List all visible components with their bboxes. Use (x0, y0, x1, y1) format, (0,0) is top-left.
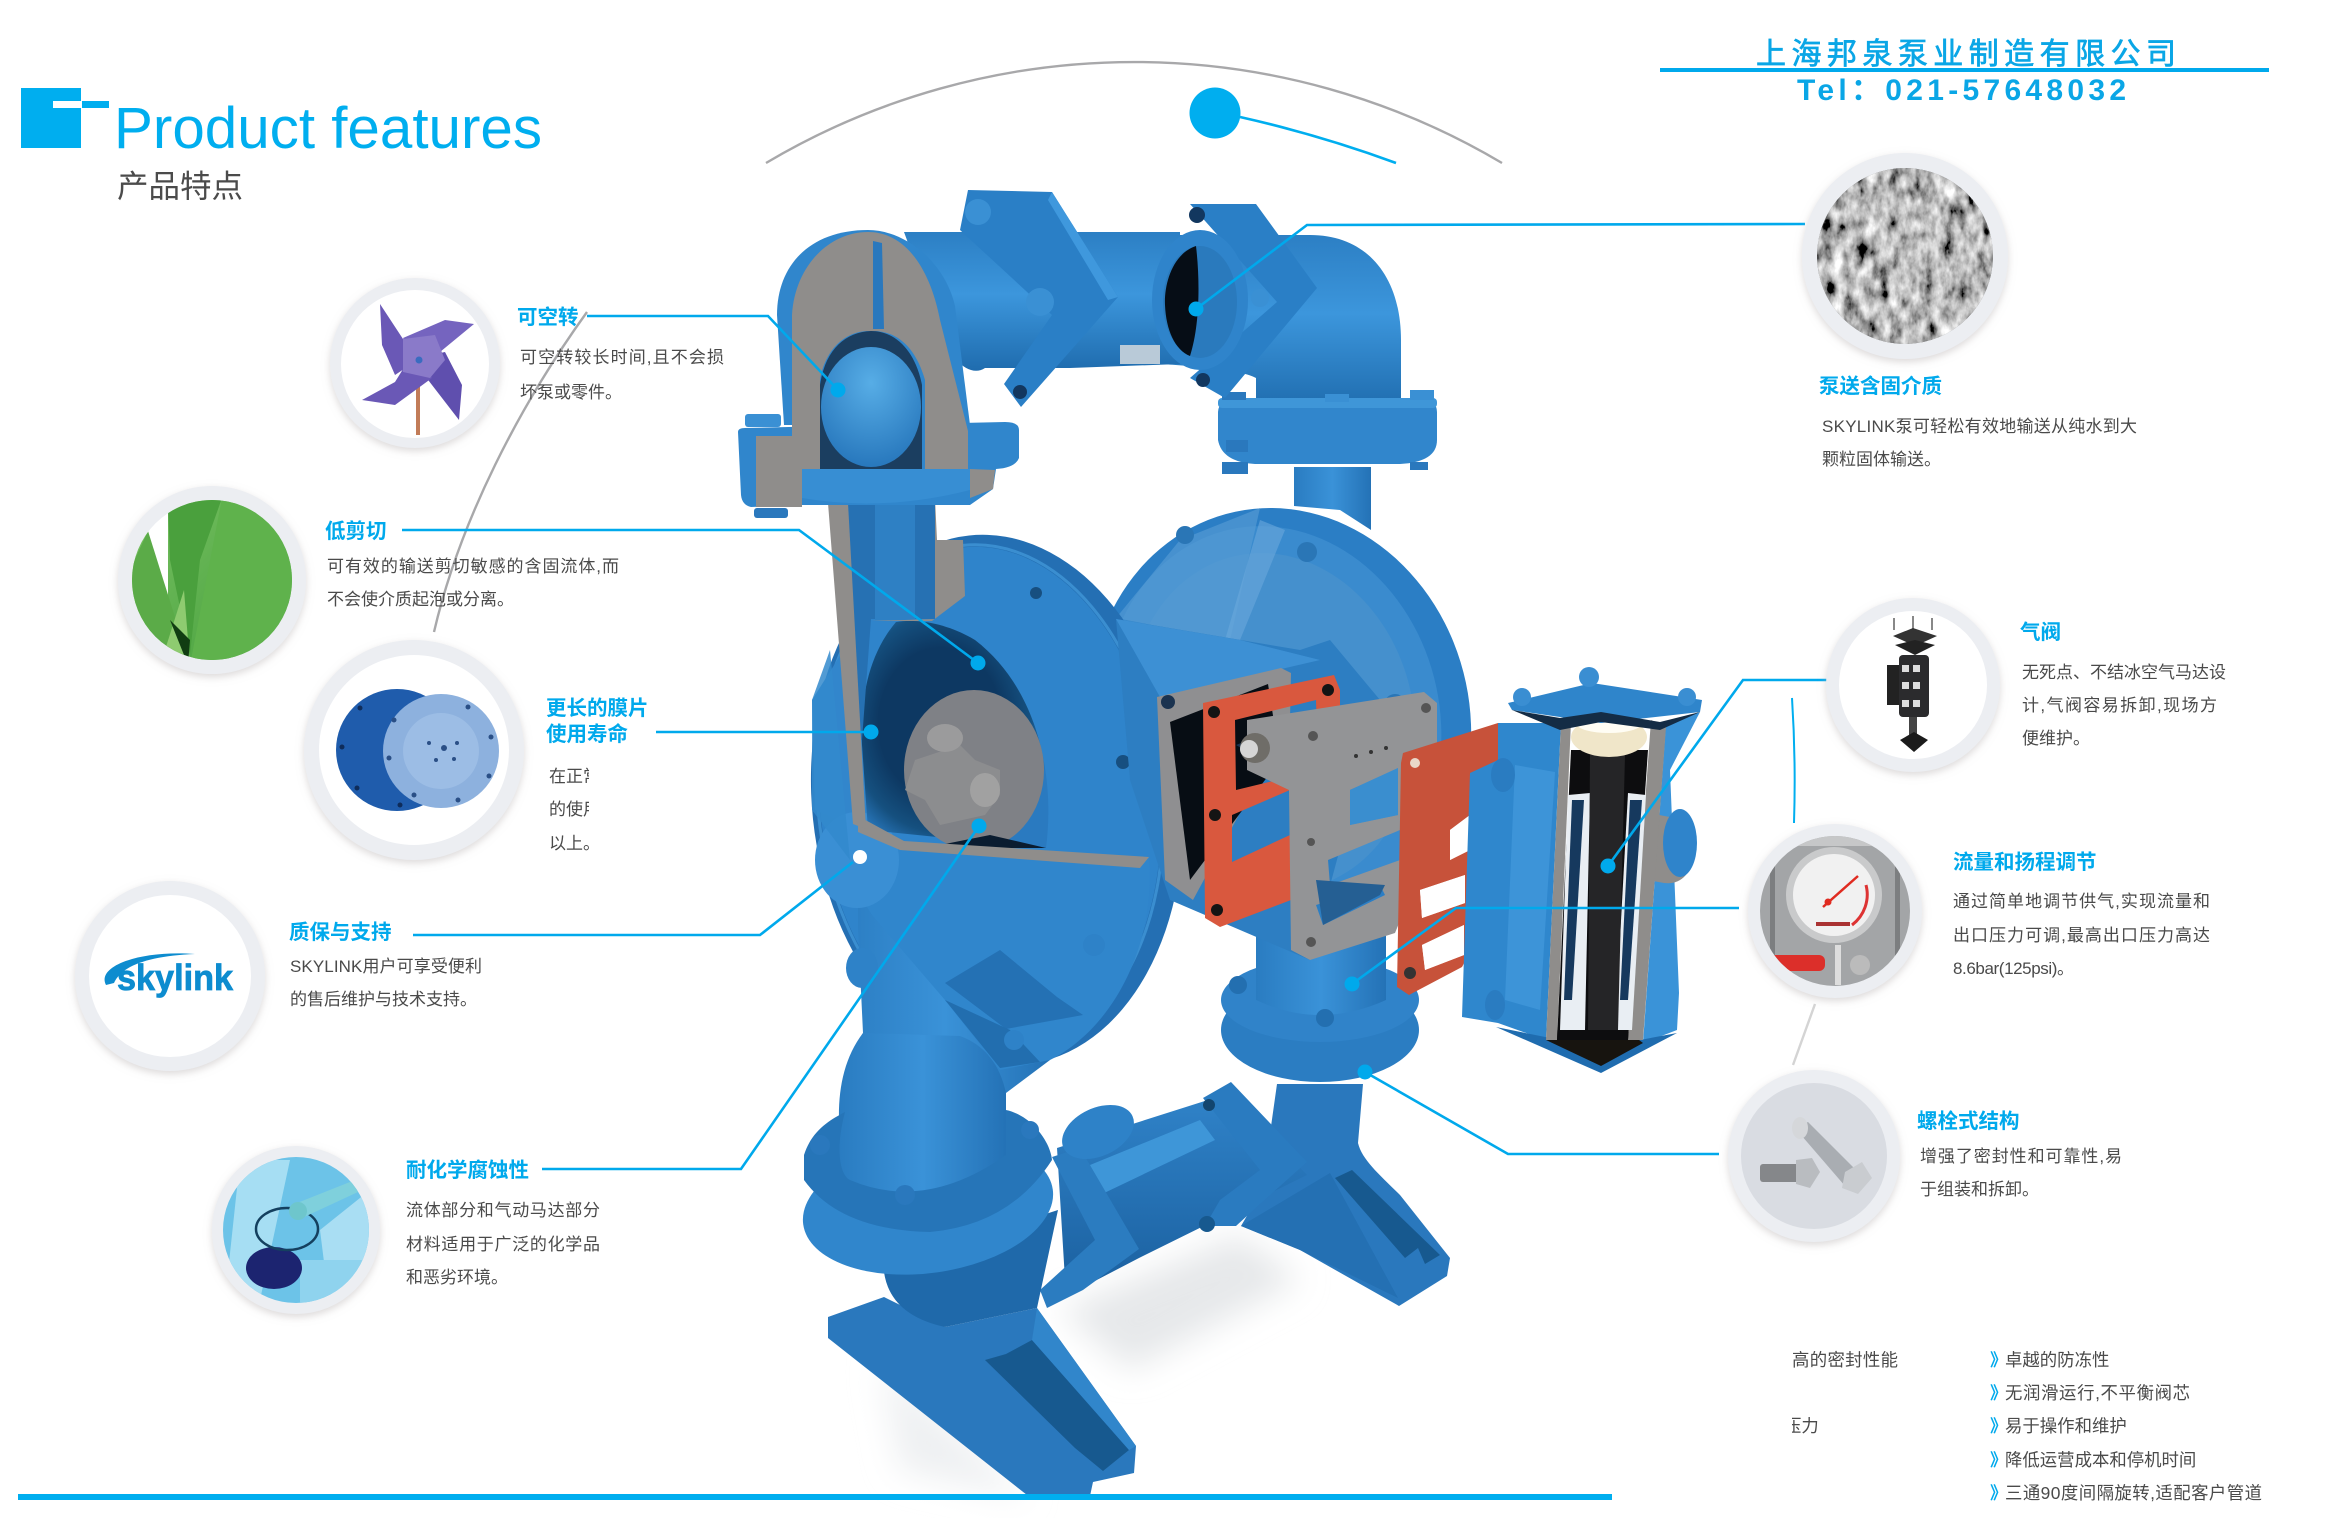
body text: 流体部分和气动马达部分 (406, 1201, 600, 1220)
icon: pinwheel (330, 278, 500, 448)
bullet list: 三通90度间隔旋转,适配客户管道 (2005, 1483, 2262, 1503)
callout lines and dots (402, 224, 1827, 1169)
center housing (1116, 619, 1380, 960)
body text (partly masked): 以上。 (549, 834, 600, 853)
body text (520, 348, 724, 402)
air motor body left (1462, 723, 1561, 1040)
body text: 颗粒固体输送。 (1822, 450, 1941, 469)
orange gasket right (1397, 723, 1498, 995)
body text (partly masked): 的使用 (549, 799, 600, 819)
feature list (1784, 1350, 2262, 1503)
body text (partly masked) (549, 767, 600, 853)
company header (1660, 38, 2269, 107)
pump illustration (738, 190, 1702, 1496)
body text (327, 557, 619, 609)
bullet list: 易于操作和维护 (2005, 1416, 2127, 1436)
body text: 通过简单地调节供气,实现流量和 (1953, 892, 2210, 911)
icon: solids texture (1802, 153, 2008, 359)
body text (1953, 892, 2210, 978)
body text: 无死点、不结冰空气马达设 (2022, 663, 2226, 682)
heading: 可空转 (517, 305, 578, 329)
icon: skylink logo: skylink (117, 957, 234, 998)
icon: pressure gauge (1748, 824, 1922, 998)
body text (290, 957, 482, 1009)
panel: 螺栓式结构 (1728, 1070, 2122, 1242)
heading: 更长的膜片 (546, 697, 648, 720)
top horizontal manifold (904, 232, 1180, 371)
orange gasket left (1203, 675, 1340, 927)
header rule (1660, 68, 2269, 72)
body text (2022, 663, 2226, 748)
upper right elbow and flange (1160, 235, 1437, 530)
title block (21, 88, 542, 204)
left notes (1784, 1350, 1898, 1436)
body text: 材料适用于广泛的化学品 (406, 1235, 600, 1254)
body text: 的售后维护与技术支持。 (290, 990, 477, 1009)
body text: SKYLINK泵可轻松有效地输送从纯水到大 (1822, 417, 2137, 436)
icon: diaphragms (304, 640, 524, 860)
back gray plate (1157, 668, 1291, 900)
heading (546, 697, 648, 746)
air motor right body and port (1643, 712, 1700, 1043)
right neck and lower flange (1221, 925, 1419, 1082)
chamber cavity and diaphragm (858, 621, 1149, 868)
left notes: 压力 (1784, 1416, 1819, 1436)
heading: 气阀 (2020, 621, 2061, 644)
icon: skylink logo (75, 881, 265, 1071)
bullet list (1990, 1350, 2262, 1503)
bullet list: 无润滑运行,不平衡阀芯 (2005, 1383, 2190, 1403)
lower manifold pipe (1040, 1082, 1307, 1308)
lower chamber body (815, 812, 1150, 1070)
heading: 低剪切 (325, 520, 386, 543)
body text (partly masked): 在正常 (549, 767, 600, 786)
air motor spool interior (1557, 750, 1648, 1040)
bullet list: 》 (1990, 1483, 2007, 1503)
icon: chemical flask (212, 1146, 380, 1314)
icon: aloe leaves (118, 486, 306, 674)
cut wall sections (1546, 722, 1571, 1040)
callout: 含固介质 leader (1188, 224, 1805, 316)
body text: SKYLINK用户可享受便利 (290, 957, 482, 976)
air motor (1462, 667, 1702, 1073)
body text: 可空转较长时间,且不会损 (520, 348, 724, 367)
body text (1920, 1147, 2122, 1199)
center gray plate and shaft (1240, 692, 1437, 960)
callout: 质保 leader (413, 850, 867, 935)
heading: 泵送含固介质 (1819, 374, 1942, 398)
callout: 流量 leader (1344, 908, 1739, 992)
panel: 低剪切 (118, 486, 619, 674)
callout: 气阀 leader (1600, 680, 1827, 874)
heading: 螺栓式结构 (1917, 1110, 2020, 1133)
right diaphragm chamber (1049, 472, 1511, 972)
body text: 8.6bar(125psi)。 (1953, 959, 2074, 978)
left notes: 高的密封性能 (1792, 1350, 1898, 1370)
callout: 可空转 leader (587, 316, 846, 398)
bullet list: 卓越的防冻性 (2005, 1350, 2109, 1370)
panel: 流量和扬程调节 (1748, 824, 2210, 998)
cutaway stem (812, 498, 965, 860)
bottom rule (18, 1494, 1612, 1500)
heading: 耐化学腐蚀性 (406, 1158, 529, 1182)
subheading: 产品特点: 产品特点 (117, 168, 243, 204)
right foot (1241, 1084, 1450, 1306)
air motor bottom plate (1496, 1027, 1677, 1073)
panel: 可空转 (330, 278, 724, 448)
heading: Product features: Product features (114, 96, 542, 161)
bullet list: 》 (1990, 1383, 2007, 1403)
ground shadow (880, 1235, 1300, 1500)
cutaway elbow and flange (738, 230, 1019, 518)
body text: 不会使介质起泡或分离。 (327, 589, 514, 609)
body text (406, 1201, 600, 1287)
callout: 低剪切 leader (402, 530, 986, 670)
body text: 计,气阀容易拆卸,现场方 (2022, 696, 2217, 715)
panel: 质保与支持 (75, 881, 482, 1071)
heading: 流量和扬程调节 (1953, 851, 2096, 874)
air motor top cap (1508, 683, 1702, 723)
clamp left (960, 190, 1118, 407)
body text: 和恶劣环境。 (406, 1268, 508, 1287)
icon: bolts (1728, 1070, 1900, 1242)
body text (1822, 417, 2137, 469)
body text: 增强了密封性和可靠性,易 (1920, 1147, 2122, 1166)
stem and lower-left body (794, 900, 1062, 1290)
body text: 坏泵或零件。 (520, 383, 622, 402)
panel: 气阀 (1826, 598, 2226, 772)
icon: air valve (1826, 598, 2000, 772)
body text: 于组装和拆卸。 (1920, 1180, 2039, 1199)
heading: 质保与支持 (289, 921, 392, 944)
telephone: Tel：021-57648032 (1797, 74, 2126, 107)
company name: 上海邦泉泵业制造有限公司 (1756, 38, 2176, 71)
callout: 螺栓 leader (1358, 1064, 1719, 1154)
body text: 出口压力可调,最高出口压力高达 (1953, 926, 2210, 945)
body text: 可有效的输送剪切敏感的含固流体,而 (327, 557, 619, 576)
clamp right and outlet port (1152, 204, 1317, 398)
bullet list: 》 (1990, 1416, 2007, 1436)
left foot (828, 1210, 1136, 1496)
body text: 便维护。 (2022, 729, 2090, 748)
panel: 耐化学腐蚀性 (212, 1146, 600, 1314)
blue orbit ball (1190, 88, 1795, 823)
bullet list: 降低运营成本和停机时间 (2005, 1450, 2196, 1470)
panel: 膜片 (304, 640, 648, 860)
bullet list: 》 (1990, 1350, 2007, 1370)
callout: 膜片 leader (656, 724, 878, 740)
bullet list: 》 (1990, 1450, 2007, 1470)
callout: 耐化学 leader (542, 818, 986, 1169)
decorative arcs (434, 62, 1815, 1065)
left diaphragm chamber (785, 516, 1209, 1084)
heading: 使用寿命 (546, 722, 628, 746)
icon: title square mark (21, 88, 109, 148)
panel: 泵送含固介质 (1802, 153, 2137, 469)
